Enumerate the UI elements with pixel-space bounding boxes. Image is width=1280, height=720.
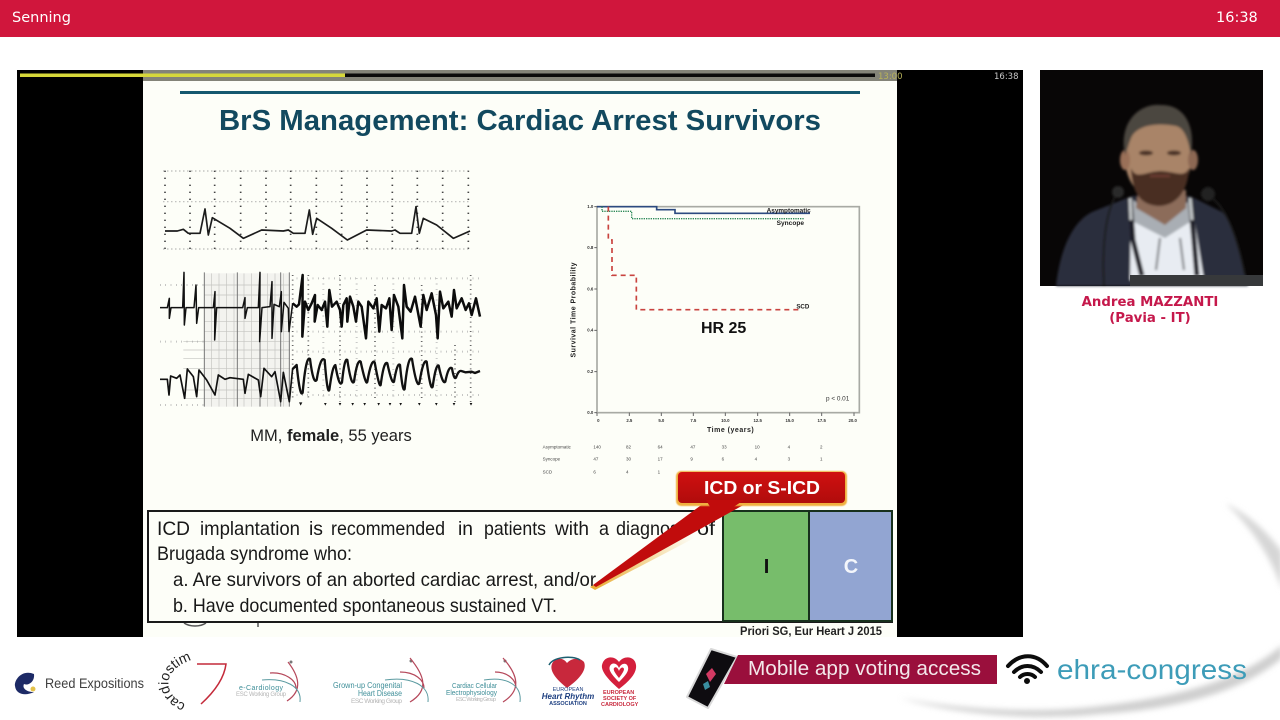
speaker jacket xyxy=(1056,196,1248,286)
callout: ICD or S-ICD xyxy=(590,471,847,590)
banner: Mobile app voting access: Mobile app voting access xyxy=(748,657,981,680)
stray logo remnants below table xyxy=(184,623,258,627)
logo: e-Cardiology: ESC Working Group xyxy=(236,692,287,698)
citation: Priori SG, Eur Heart J 2015 xyxy=(740,626,883,638)
speaker name: Andrea MAZZANTI xyxy=(1082,295,1218,310)
numbers at risk table: 6 xyxy=(722,457,725,462)
logo: Grown-up Congenital Heart Disease: Heart Disease xyxy=(358,689,402,698)
logo: Reed Expositions: Reed Expositions xyxy=(45,676,144,691)
level of evidence cell: C xyxy=(844,556,858,578)
numbers at risk table: 4 xyxy=(626,470,629,475)
logo: European Heart Rhythm Association: Heart Rhythm xyxy=(542,692,594,701)
recommendation table xyxy=(148,511,892,622)
numbers at risk table: 1 xyxy=(658,470,661,475)
series labels: Asymptomatic xyxy=(767,207,811,214)
lanyards xyxy=(1130,198,1142,276)
recommendation text: with xyxy=(554,518,589,540)
logo: European Society of Cardiology: CARDIOLOGY xyxy=(601,702,639,708)
callout pointer glow xyxy=(590,534,702,590)
recommendation text: a. Are survivors of an aborted cardiac arrest, and/or xyxy=(173,569,596,591)
logo: Cardiostim: cardiostim xyxy=(158,654,191,710)
numbers at risk table: 64 xyxy=(658,445,663,450)
class of recommendation cell: I xyxy=(764,556,769,578)
series labels: SCD xyxy=(796,304,810,311)
slide background xyxy=(143,70,897,637)
numbers at risk table: SCD xyxy=(543,470,553,475)
eyes xyxy=(1139,150,1153,156)
y axis values: 0.6 xyxy=(587,286,594,291)
ECG caption: MM, female, 55 years xyxy=(250,427,412,445)
logo: European Society of Cardiology: EUROPEAN xyxy=(603,690,634,696)
logo: Cardiac Cellular Electrophysiology: ESC Working Group xyxy=(456,697,496,703)
series labels xyxy=(767,207,811,311)
callout pointer xyxy=(593,503,747,587)
current time: 16:38 xyxy=(994,72,1018,82)
microphones xyxy=(1112,186,1124,198)
numbers at risk table: 4 xyxy=(788,445,791,450)
class of recommendation cell xyxy=(723,511,809,621)
recommendation text: ICD xyxy=(157,518,190,540)
recommendation text: recommended xyxy=(331,518,445,540)
numbers at risk table: 1 xyxy=(820,457,823,462)
logo: Cardiac Cellular Electrophysiology xyxy=(446,658,520,703)
recommendation text: in xyxy=(458,518,473,540)
mouth xyxy=(1150,175,1170,177)
ECG panel xyxy=(160,171,483,407)
logo: European Heart Rhythm Association: EUROPEAN xyxy=(553,687,583,693)
y axis values: 0.8 xyxy=(587,245,594,250)
head xyxy=(1125,116,1191,200)
video panel xyxy=(17,70,1023,637)
recommendation text: a xyxy=(599,518,609,540)
numbers at risk table: 9 xyxy=(690,457,693,462)
axis ticks xyxy=(594,207,854,416)
callout: ICD or S-ICD: ICD or S-ICD xyxy=(704,478,820,498)
speaker video xyxy=(1040,70,1263,286)
top grey strip xyxy=(143,70,897,81)
decorative swoosh shading xyxy=(900,503,1280,717)
logo: Cardiac Cellular Electrophysiology: Cardiac Cellular xyxy=(452,683,498,690)
recommendation text: implantation xyxy=(200,518,300,540)
numbers at risk table: 47 xyxy=(593,457,599,462)
ehra-congress wordmark: ehra-congress xyxy=(1057,654,1247,685)
recommendation text: diagnosis xyxy=(616,518,692,540)
slide title rule xyxy=(180,91,860,94)
recommendation text: of xyxy=(697,518,716,540)
numbers at risk table: 2 xyxy=(820,445,823,450)
numbers at risk table: 3 xyxy=(788,457,791,462)
y axis values: 1.0 xyxy=(587,204,594,209)
x axis values: 12.5 xyxy=(753,418,762,423)
logo: European Heart Rhythm Association: ASSOCIATION xyxy=(549,701,587,707)
y axis values: 0.0 xyxy=(587,410,594,415)
y axis values: 0.4 xyxy=(587,328,594,333)
x axis values: 5.0 xyxy=(658,418,665,423)
level of evidence cell xyxy=(809,511,892,621)
logo: Grown-up Congenital Heart Disease: Grown-up Congenital xyxy=(333,681,402,690)
logo: European Society of Cardiology: SOCIETY OF xyxy=(603,696,637,702)
curve: asymptomatic xyxy=(597,207,810,213)
y axis label: Survival Time Probability xyxy=(570,262,577,357)
numbers at risk table: 33 xyxy=(722,445,727,450)
logo: Reed Expositions xyxy=(15,673,144,694)
numbers at risk table: 10 xyxy=(755,445,760,450)
numbers at risk table: 4 xyxy=(755,457,758,462)
recommendation text: is xyxy=(309,518,323,540)
curve: syncope xyxy=(602,207,804,219)
numbers at risk table: 30 xyxy=(626,457,631,462)
lectern xyxy=(1130,275,1263,286)
ECG: sinus rhythm trace xyxy=(163,171,470,250)
logo: Grown-up Congenital Heart Disease: ESC Working Group xyxy=(351,698,402,705)
curve: SCD xyxy=(608,207,800,310)
neck xyxy=(1136,190,1186,225)
speaker name: (Pavia - IT) xyxy=(1109,311,1191,326)
y axis values: 0.2 xyxy=(587,369,594,374)
numbers at risk table: 6 xyxy=(593,470,596,475)
x axis values: 0 xyxy=(597,418,600,423)
numbers at risk table: 47 xyxy=(690,445,696,450)
progress bar xyxy=(20,74,875,77)
numbers at risk table: 82 xyxy=(626,445,631,450)
beard xyxy=(1131,168,1189,206)
ECG: ventricular arrhythmia strips xyxy=(160,272,483,407)
numbers at risk table: 17 xyxy=(658,457,663,462)
logo: Grown-up Congenital Heart Disease xyxy=(333,658,428,705)
recommendation text: patients xyxy=(484,518,546,540)
x axis values: 7.5 xyxy=(690,418,697,423)
hazard ratio: HR 25 xyxy=(701,320,746,337)
p value: p < 0.01 xyxy=(826,395,850,402)
icon: wifi xyxy=(1008,656,1047,683)
recommendation text xyxy=(157,518,716,617)
session name: Senning xyxy=(12,10,71,26)
y axis values xyxy=(587,204,594,415)
series labels: Syncope xyxy=(777,220,805,227)
title: BrS Management: Cardiac Arrest Survivors xyxy=(219,105,821,137)
Kaplan-Meier survival chart xyxy=(543,204,859,475)
logo: Cardiac Cellular Electrophysiology: Electrophysiology xyxy=(446,690,497,697)
x axis values: 10.0 xyxy=(721,418,730,423)
clock: 16:38 xyxy=(1216,10,1258,26)
speaker name xyxy=(1082,295,1218,326)
icon: smartphone xyxy=(687,649,737,708)
x axis values: 2.5 xyxy=(626,418,633,423)
numbers at risk table: 140 xyxy=(593,445,601,450)
logo: Cardiostim xyxy=(158,654,227,710)
logo: European Society of Cardiology xyxy=(601,657,639,708)
numbers at risk table: Syncope xyxy=(543,457,561,462)
x axis values: 15.0 xyxy=(785,418,794,423)
recommendation text: b. Have documented spontaneous sustained VT. xyxy=(173,595,557,617)
x axis label: Time (years) xyxy=(707,427,754,434)
logo: e-Cardiology: e-Cardiology xyxy=(239,685,284,692)
x axis values: 20.0 xyxy=(848,418,857,423)
top header bar xyxy=(0,0,1280,37)
logo: European Heart Rhythm Association xyxy=(542,657,594,707)
logo: e-Cardiology xyxy=(236,660,300,702)
numbers at risk table xyxy=(543,445,823,475)
hair xyxy=(1124,105,1192,155)
shirt xyxy=(1130,205,1204,280)
recommendation text: Brugada syndrome who: xyxy=(157,543,352,565)
numbers at risk table: Asymptomatic xyxy=(543,445,572,450)
banner: Mobile app voting access xyxy=(724,655,997,684)
x axis values: 17.5 xyxy=(817,418,826,423)
plot frame xyxy=(597,207,859,413)
x axis values xyxy=(597,418,857,423)
elapsed target time: 13:00 xyxy=(878,72,902,82)
